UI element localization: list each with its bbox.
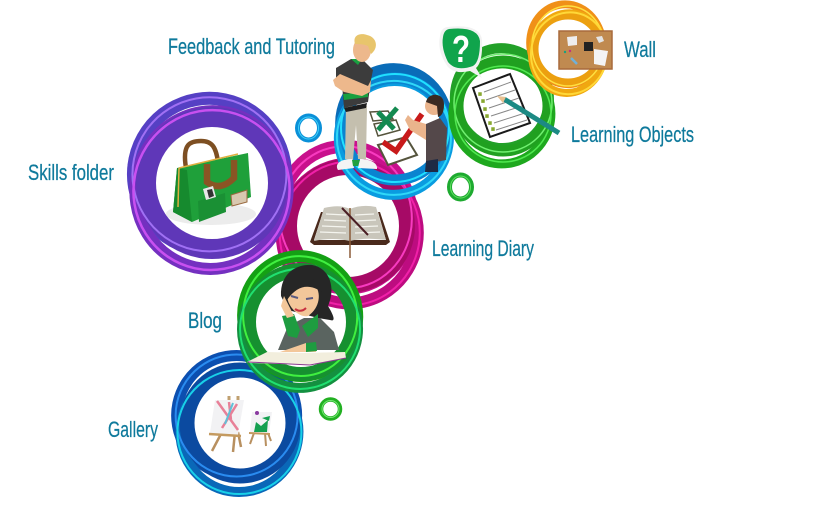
- label: Learning Objects: Learning Objects: [571, 122, 694, 147]
- label: Feedback and Tutoring: Feedback and Tutoring: [168, 34, 335, 59]
- icon: girl with book: [247, 265, 346, 365]
- ring: Feedback and Tutoring (blue): [330, 61, 458, 202]
- label: Wall: Wall: [624, 37, 656, 62]
- ring: Skills folder (purple): [119, 85, 304, 285]
- icon: standing boy: [333, 34, 377, 170]
- icon: easels: [209, 396, 272, 452]
- icon: notepad and pencil: [473, 74, 559, 137]
- label: Skills folder: Skills folder: [28, 160, 114, 185]
- small ring: green upper: [450, 175, 472, 199]
- label: Blog: Blog: [188, 308, 222, 333]
- ring: Wall (orange): [524, 0, 614, 100]
- icon: question speech bubble: [439, 26, 482, 78]
- ring: Gallery (blue): [166, 345, 311, 504]
- ring: Blog (green): [232, 249, 368, 397]
- icon: checklist: [370, 108, 422, 165]
- ring: Learning Objects (green): [446, 42, 557, 170]
- icon: question speech bubble: ?: [452, 29, 470, 71]
- icon: open book: [310, 206, 390, 258]
- label: Gallery: Gallery: [108, 417, 158, 442]
- icon: tutor boy: [405, 95, 447, 172]
- small ring: blue: [298, 116, 320, 140]
- icon: corkboard: [559, 31, 612, 69]
- icon: green bag: [166, 141, 256, 225]
- small ring: green lower: [321, 400, 340, 418]
- ring: Learning Diary (magenta): [268, 138, 431, 316]
- label: Learning Diary: Learning Diary: [432, 236, 534, 261]
